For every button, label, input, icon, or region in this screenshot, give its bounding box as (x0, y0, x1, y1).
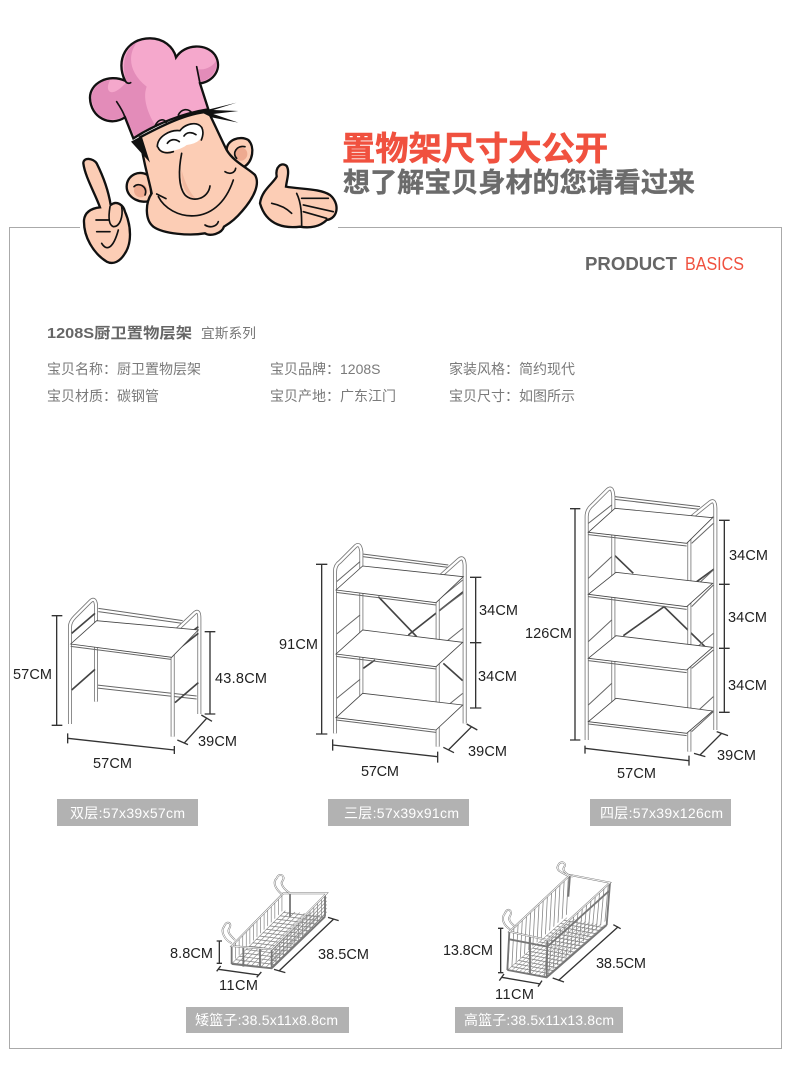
chef hat (90, 38, 218, 138)
panel: tall basket (443, 862, 646, 1033)
rack drawing: three-tier (335, 545, 465, 747)
product specification list (47, 361, 575, 404)
caption tag (328, 799, 469, 826)
left pointing hand (83, 159, 130, 263)
subtitle: 想了解宝贝身材的您请看过来 (343, 168, 695, 198)
basket drawing: tall (503, 862, 610, 977)
product specification list: 宝贝名称：厨卫置物层架 (47, 361, 201, 377)
length label: 38.5CM (596, 956, 646, 972)
left ear (127, 173, 152, 202)
caption tag: 矮篮子:38.5x11x8.8cm (195, 1012, 338, 1028)
upper tier label: 34CM (479, 603, 518, 619)
caption tag: 四层:57x39x126cm (600, 805, 723, 821)
heading: product basics (585, 253, 744, 274)
length label: 38.5CM (318, 947, 369, 963)
caption tag (186, 1007, 349, 1033)
dimension lines (52, 616, 215, 754)
face (140, 112, 257, 235)
top tier label: 34CM (729, 548, 768, 564)
product specification list: 家装风格：简约现代 (449, 361, 575, 377)
caption tag: 三层:57x39x91cm (344, 805, 459, 821)
caption tag: 高篮子:38.5x11x13.8cm (464, 1012, 614, 1028)
product specification list: 宝贝产地：广东江门 (270, 388, 396, 404)
basket drawing: low (223, 875, 327, 968)
product specification list: 宝贝材质：碳钢管 (47, 388, 159, 404)
lower tier label: 34CM (478, 669, 517, 685)
caption tag (455, 1007, 623, 1033)
dimension lines (498, 925, 621, 987)
rack drawing: four-tier (587, 488, 715, 752)
product specification list: 宝贝尺寸：如图所示 (449, 388, 575, 404)
dimension lines (316, 564, 481, 763)
width label: 11CM (495, 987, 534, 1003)
caption tag: 双层:57x39x57cm (70, 805, 185, 821)
product specification list: 宝贝品牌：1208S (270, 361, 380, 377)
product name (47, 324, 256, 342)
product name: 宜斯系列 (201, 326, 256, 341)
width label: 57CM (361, 764, 399, 780)
icon: chef mascot (83, 38, 337, 263)
rack drawing: two-tier (70, 600, 199, 737)
height label: 8.8CM (170, 946, 213, 962)
height label: 13.8CM (443, 943, 493, 959)
dimension lines (570, 509, 730, 766)
panel: three-tier rack (279, 545, 518, 826)
depth label: 39CM (198, 734, 237, 750)
bottom tier label: 34CM (728, 678, 767, 694)
panel: low basket (170, 875, 369, 1033)
right ear (227, 138, 252, 167)
caption tag (57, 799, 198, 826)
shelf height label: 43.8CM (215, 671, 267, 687)
height label: 126CM (525, 626, 572, 642)
depth label: 39CM (717, 748, 756, 764)
height label: 57CM (13, 667, 52, 683)
width label: 57CM (93, 756, 132, 772)
width label: 57CM (617, 766, 656, 782)
dimension lines (217, 917, 339, 977)
product name: 1208S厨卫置物层架 (47, 324, 192, 342)
right open hand (260, 164, 337, 227)
panel: two-tier rack (13, 600, 267, 826)
panel: four-tier rack (525, 488, 768, 826)
width label: 11CM (219, 978, 258, 994)
title: 置物架尺寸大公开 (342, 130, 608, 167)
caption tag (590, 799, 731, 826)
heading: product basics: PRODUCT (585, 253, 678, 274)
depth label: 39CM (468, 744, 507, 760)
middle tier label: 34CM (728, 610, 767, 626)
heading: product basics: BASICS (685, 253, 744, 274)
height label: 91CM (279, 637, 318, 653)
hair (131, 103, 238, 163)
